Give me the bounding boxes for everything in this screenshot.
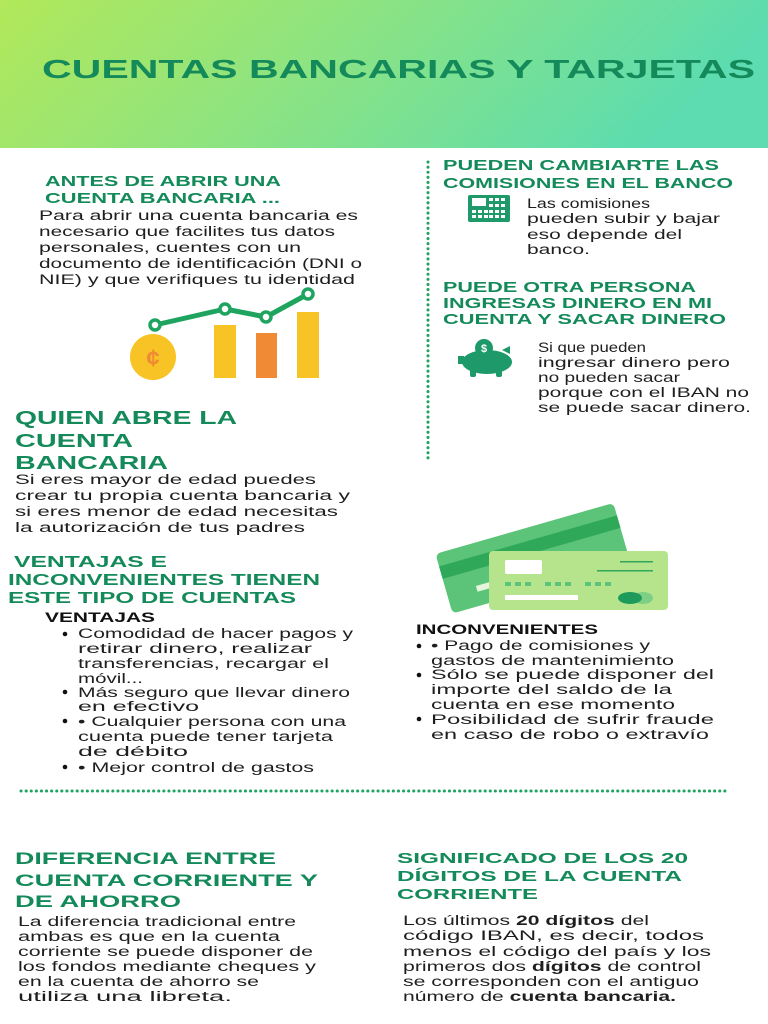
heading: quien abre bbox=[15, 408, 237, 473]
heading: ventajas e inconvenientes: VENTAJAS E bbox=[14, 554, 168, 571]
heading: antes de abrir: CUENTA BANCARIA ... bbox=[45, 190, 280, 207]
heading: antes de abrir: ANTES DE ABRIR UNA bbox=[45, 173, 281, 190]
text block: diferencia: en la cuenta de ahorro se bbox=[18, 974, 259, 989]
heading: significado: DÍGITOS DE LA CUENTA bbox=[397, 868, 682, 885]
section: comisiones bbox=[443, 157, 733, 257]
section: antes de abrir bbox=[39, 173, 362, 287]
icon: coin bbox=[130, 334, 176, 380]
icon: credit cards bbox=[435, 503, 668, 614]
list: inconvenientes: gastos de mantenimiento bbox=[431, 653, 674, 668]
text block: significado: primeros dos dígitos de control bbox=[403, 959, 701, 974]
divider vertical bbox=[426, 162, 430, 462]
text block: otra persona: Si que pueden bbox=[538, 340, 646, 355]
text block: otra persona: ingresar dinero pero bbox=[538, 355, 730, 370]
list: ventajas: • Mejor control de gastos bbox=[78, 760, 314, 775]
heading: significado: CORRIENTE bbox=[397, 886, 538, 903]
text block: quien: si eres menor de edad necesitas bbox=[15, 504, 338, 519]
text block: diferencia bbox=[18, 914, 316, 1004]
list: inconvenientes: Posibilidad de sufrir fraude bbox=[431, 712, 714, 727]
text block: diferencia: corriente se puede disponer de bbox=[18, 944, 313, 959]
list: ventajas: en efectivo bbox=[78, 699, 199, 714]
list: inconvenientes: INCONVENIENTES bbox=[416, 622, 598, 637]
heading: otra persona bbox=[443, 279, 726, 328]
section: otra persona bbox=[443, 279, 751, 415]
list: ventajas bbox=[45, 610, 353, 775]
chart: growth bars with coin bbox=[130, 289, 319, 380]
text block: comisiones bbox=[527, 196, 721, 257]
text block: otra persona: se puede sacar dinero. bbox=[538, 400, 751, 415]
heading: ventajas e inconvenientes bbox=[8, 554, 320, 607]
text block: antes: personales, cuentes con un bbox=[39, 240, 301, 255]
list: ventajas: transferencias, recargar el bbox=[78, 656, 329, 671]
title: CUENTAS BANCARIAS Y TARJETAS bbox=[42, 54, 755, 84]
section: quien abre bbox=[15, 408, 350, 535]
text block: significado: menos el código del país y los bbox=[403, 944, 711, 959]
heading: comisiones bbox=[443, 157, 733, 192]
list: inconvenientes bbox=[416, 622, 714, 742]
heading: comisiones: PUEDEN CAMBIARTE LAS bbox=[443, 157, 719, 174]
text block: antes: Para abrir una cuenta bancaria es bbox=[39, 208, 358, 223]
heading: antes de abrir bbox=[45, 173, 281, 207]
text block: otra persona: no pueden sacar bbox=[538, 370, 681, 385]
text block: significado: Los últimos 20 dígitos del bbox=[403, 913, 649, 928]
list: ventajas: • Cualquier persona con una bbox=[78, 714, 347, 729]
heading: diferencia: DIFERENCIA ENTRE bbox=[15, 849, 276, 868]
text block: otra persona: porque con el IBAN no bbox=[538, 385, 749, 400]
heading: ventajas e inconvenientes: ESTE TIPO DE CUENTAS bbox=[8, 590, 296, 607]
icon: coin: ¢ bbox=[146, 345, 160, 372]
text block: significado: código IBAN, es decir, todos bbox=[403, 928, 704, 943]
section: ventajas e inconvenientes bbox=[8, 554, 353, 775]
text block: significado: se corresponden con el antiguo bbox=[403, 974, 699, 989]
list: ventajas: de débito bbox=[78, 744, 188, 759]
text block: quien: Si eres mayor de edad puedes bbox=[15, 472, 316, 487]
heading: diferencia: CUENTA CORRIENTE Y bbox=[15, 871, 319, 890]
text block: significado: número de cuenta bancaria. bbox=[403, 989, 676, 1004]
list: ventajas: VENTAJAS bbox=[45, 610, 155, 625]
heading: significado: SIGNIFICADO DE LOS 20 bbox=[397, 850, 688, 867]
text block: diferencia: ambas es que en la cuenta bbox=[18, 929, 281, 944]
text block: comisiones: pueden subir y bajar bbox=[527, 211, 721, 226]
text block: antes: necesario que facilites tus datos bbox=[39, 224, 335, 239]
text block: comisiones: eso depende del bbox=[527, 227, 682, 242]
heading: quien abre: CUENTA bbox=[15, 431, 133, 451]
section: diferencia bbox=[15, 849, 319, 1004]
text block: quien bbox=[15, 472, 350, 535]
list: inconvenientes: cuenta en ese momento bbox=[431, 697, 675, 712]
text block: comisiones: Las comisiones bbox=[527, 196, 650, 211]
text block: quien: crear tu propia cuenta bancaria y bbox=[15, 488, 350, 503]
list: ventajas: cuenta puede tener tarjeta bbox=[78, 729, 334, 744]
text block: diferencia: los fondos mediante cheques y bbox=[18, 959, 316, 974]
list: ventajas: Más seguro que llevar dinero bbox=[78, 685, 350, 700]
text block: otra persona bbox=[538, 340, 751, 415]
section: significado bbox=[397, 850, 711, 1004]
text block: antes bbox=[39, 208, 362, 287]
icon: piggy bank: $ bbox=[481, 343, 487, 355]
icon: calculator bbox=[468, 195, 510, 222]
list: ventajas: Comodidad de hacer pagos y bbox=[78, 626, 353, 641]
icon: piggy bank bbox=[458, 339, 512, 377]
list: ventajas: retirar dinero, realizar bbox=[78, 641, 313, 656]
header banner bbox=[0, 0, 768, 148]
list: inconvenientes: importe del saldo de la bbox=[431, 682, 673, 697]
text block: diferencia: La diferencia tradicional entre bbox=[18, 914, 296, 929]
heading: significado bbox=[397, 850, 688, 903]
divider horizontal bbox=[21, 790, 725, 792]
heading: ventajas e inconvenientes: INCONVENIENTES TIENEN bbox=[8, 572, 320, 589]
text block: significado bbox=[403, 913, 711, 1004]
heading: otra persona: INGRESAS DINERO EN MI bbox=[443, 295, 712, 312]
text block: antes: NIE) y que verifiques tu identidad bbox=[39, 272, 355, 287]
heading: comisiones: COMISIONES EN EL BANCO bbox=[443, 175, 733, 192]
text block: comisiones: banco. bbox=[527, 242, 590, 257]
heading: quien abre: BANCARIA bbox=[15, 453, 168, 473]
heading: quien abre: QUIEN ABRE LA bbox=[15, 408, 237, 428]
text block: antes: documento de identificación (DNI o bbox=[39, 256, 362, 271]
text block: diferencia: utiliza una libreta. bbox=[18, 989, 232, 1004]
list: inconvenientes: • Pago de comisiones y bbox=[431, 638, 650, 653]
heading: diferencia bbox=[15, 849, 319, 911]
text block: quien: la autorización de tus padres bbox=[15, 520, 305, 535]
heading: otra persona: PUEDE OTRA PERSONA bbox=[443, 279, 696, 296]
list: inconvenientes: en caso de robo o extravío bbox=[431, 727, 709, 742]
heading: otra persona: CUENTA Y SACAR DINERO bbox=[443, 311, 726, 328]
heading: diferencia: DE AHORRO bbox=[15, 892, 181, 911]
list: ventajas: móvil... bbox=[78, 671, 143, 686]
list: inconvenientes: Sólo se puede disponer del bbox=[431, 667, 714, 682]
